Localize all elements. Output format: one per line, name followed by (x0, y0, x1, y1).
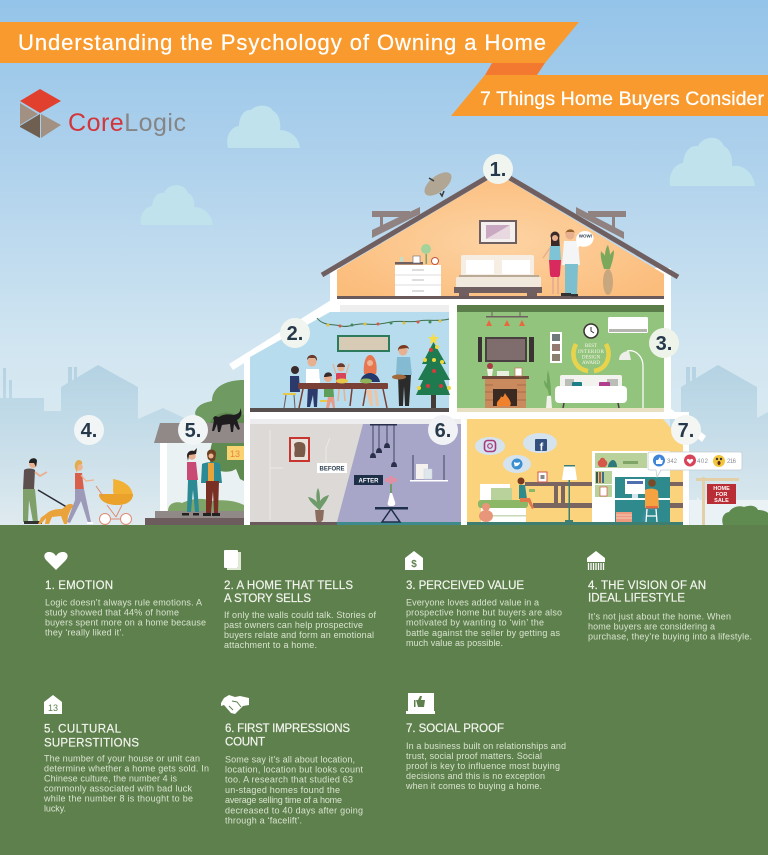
interior design award: BEST (585, 344, 597, 349)
social reactions bubble (648, 452, 742, 477)
text: emotion (45, 598, 206, 638)
icon: house number 13: 13 (48, 703, 58, 713)
home for sale sign (696, 477, 739, 525)
badge 6: 6. (435, 420, 451, 442)
instagram cloud (475, 437, 505, 455)
text: superstitions: commonly associated with bad luck (44, 783, 192, 793)
text: story (224, 610, 376, 650)
dresser (395, 244, 441, 296)
fireplace (482, 363, 529, 408)
panel: attic bedroom (322, 171, 678, 299)
bed with teddy (478, 484, 528, 522)
house number 13 sign: 13 (230, 449, 240, 459)
christmas tree (416, 333, 451, 408)
brown shelves (525, 482, 683, 508)
house walls (229, 268, 706, 525)
heading: superstitions: 5. CULTURAL (44, 723, 122, 735)
text: perceived value (406, 598, 562, 648)
text: story: If only the walls could talk. Stories of (224, 610, 376, 620)
background skyline (0, 365, 768, 525)
badge 4 (74, 415, 104, 445)
house number 13 sign (227, 446, 244, 460)
text: superstitions (43, 753, 209, 813)
text: first impressions (225, 755, 363, 825)
badge 3: 3. (656, 333, 672, 355)
heading: social proof: 7. SOCIAL PROOF (406, 723, 504, 735)
section: superstitions (43, 695, 209, 813)
text: first impressions: Some say it’s all about location, (225, 755, 355, 765)
table lamp (562, 465, 577, 522)
ribbon fold (485, 63, 545, 75)
ground panel (0, 525, 768, 855)
television and speakers (478, 337, 534, 362)
baby stroller (96, 479, 133, 524)
heading: perceived value: 3. PERCEIVED VALUE (406, 580, 524, 592)
heading: story: A STORY SELLS (224, 593, 311, 605)
couple viewing room (543, 229, 594, 296)
heading: lifestyle (588, 580, 706, 605)
home for sale sign: FOR (716, 492, 727, 498)
text: lifestyle: purchase, they’re buying into a lifestyle. (588, 631, 752, 641)
black cat (212, 408, 241, 432)
text: lifestyle: It’s not just about the home. When (588, 611, 731, 621)
text: emotion: study showed that 44% of home (45, 608, 179, 618)
heading: story (224, 580, 353, 605)
badge 3 (649, 328, 679, 358)
text: first impressions: through a ‘facelift’. (225, 815, 302, 825)
text: first impressions: un-staged homes found the (225, 785, 340, 795)
text: perceived value: Everyone loves added value in a (406, 598, 539, 608)
text: first impressions: average selling time of a home (225, 795, 342, 805)
icon: laptop with thumbs up (406, 693, 435, 714)
walking couple with dog and stroller (23, 458, 133, 524)
wall picture (479, 220, 517, 244)
text: superstitions: The number of your house or unit can (44, 753, 200, 763)
section: emotion (44, 552, 206, 638)
couple on porch (182, 448, 222, 516)
table with flowers (375, 476, 408, 522)
social reactions bubble: 402 (697, 459, 709, 465)
text: lifestyle (588, 611, 752, 641)
small wall frame (538, 472, 547, 482)
text: first impressions: decreased to 40 days after going (225, 805, 363, 815)
dining table (298, 378, 388, 408)
badge 1: 1. (490, 159, 506, 181)
girl with book (518, 478, 535, 509)
roof (322, 171, 678, 277)
interior design award: INTERIOR (578, 350, 605, 355)
text: perceived value: much value as possible. (406, 638, 503, 648)
text: first impressions: too. A research that studied 63 (225, 775, 353, 785)
heading: first impressions: COUNT (225, 736, 265, 748)
window blind (337, 335, 390, 352)
floor plant (544, 370, 552, 408)
heading: superstitions (44, 723, 139, 749)
badge 4: 4. (81, 420, 97, 442)
home for sale sign: SALE (714, 498, 729, 504)
text: social proof: trust, social proof matters. Social (406, 751, 542, 761)
badge 1 (483, 154, 513, 184)
sofa (555, 375, 627, 408)
dog (38, 504, 74, 524)
icon: house with fence (587, 551, 605, 570)
icon: book (224, 550, 241, 570)
section: lifestyle (587, 551, 752, 641)
icon: house number 13 (44, 695, 62, 714)
subtitle banner: 7 Things Home Buyers Consider (480, 88, 764, 110)
social reactions bubble: 216 (727, 459, 737, 465)
social reactions bubble: 342 (667, 459, 678, 465)
man at computer (641, 479, 659, 522)
CoreLogic logo: CoreLogic (68, 109, 186, 137)
facebook cloud (523, 433, 557, 454)
text: perceived value: prospective home but buyers are also (406, 608, 562, 618)
wow speech bubble: WOW! (579, 234, 593, 238)
badge 7 (671, 415, 701, 445)
text: first impressions: location, location but looks count (225, 765, 363, 775)
text: superstitions: Chinese culture, the number 4 is (44, 773, 178, 783)
section: perceived value (405, 551, 562, 648)
subtitle banner (451, 75, 768, 116)
track light (486, 312, 528, 326)
text: perceived value: motivated by wanting to ‘win’ the (406, 618, 544, 628)
text: emotion: buyers spent more on a home because (45, 618, 206, 628)
icon: handshake (221, 695, 249, 714)
floor lamp (619, 351, 643, 408)
text: perceived value: battle against the seller by getting as (406, 628, 560, 638)
heading: lifestyle: IDEAL LIFESTYLE (588, 593, 685, 605)
dining family (283, 345, 412, 408)
clouds (141, 106, 755, 225)
text: superstitions: lucky. (44, 803, 66, 813)
text: story: buyers relate and form an emotional (224, 630, 374, 640)
interior design award: AWARD (582, 361, 600, 366)
facebook cloud: f (540, 442, 544, 454)
heading: lifestyle: 4. THE VISION OF AN (588, 580, 706, 592)
badge 5: 5. (185, 420, 201, 442)
heading: emotion: 1. EMOTION (45, 580, 113, 592)
heading: superstitions: SUPERSTITIONS (44, 737, 139, 749)
icon: house with dollar (405, 551, 423, 570)
text: story: attachment to a home. (224, 640, 317, 650)
section: story (224, 550, 376, 650)
text: social proof (405, 741, 566, 791)
sky background (0, 0, 768, 526)
section: first impressions (221, 695, 363, 825)
badge 6 (428, 415, 458, 445)
white bookcase and desk (592, 451, 670, 522)
CoreLogic logo (20, 89, 186, 138)
potted plant (601, 245, 614, 295)
solar panels (372, 207, 626, 239)
heading: story: 2. A HOME THAT TELLS (224, 580, 353, 592)
text: emotion: Logic doesn’t always rule emotions. A (45, 598, 202, 608)
old picture (289, 437, 310, 462)
twitter cloud (503, 455, 531, 473)
white fence (689, 497, 768, 525)
icon: house with dollar: $ (411, 559, 417, 570)
panel: dining room (250, 305, 451, 412)
text: superstitions: determine whether a home gets sold. In (44, 763, 209, 773)
heading: first impressions: 6. FIRST IMPRESSIONS (225, 723, 350, 735)
wall clock (584, 324, 598, 338)
text: social proof: proof is key to influence most buying (406, 761, 560, 771)
badge 2: 2. (287, 323, 303, 345)
before label (317, 463, 347, 473)
panel: before and after room (250, 419, 461, 525)
after label: AFTER (358, 478, 379, 484)
air conditioner (608, 317, 648, 333)
home for sale sign: HOME (713, 486, 730, 492)
interior design award (573, 344, 609, 371)
text: social proof: decisions and this is no exception (406, 771, 545, 781)
after label (354, 475, 383, 485)
badge 7: 7. (678, 420, 694, 442)
bush (722, 506, 768, 525)
bed (454, 255, 542, 296)
wall photo frames (550, 332, 562, 363)
heading: first impressions (225, 723, 350, 748)
porch and tree (145, 380, 244, 525)
text: superstitions: while the number 8 is thought to be (43, 793, 193, 803)
interior design award: DESIGN (582, 356, 601, 360)
text: lifestyle: home buyers are considering a (588, 621, 715, 631)
string lights (317, 318, 449, 328)
satellite dish (420, 168, 456, 200)
panel: home office and bedroom (467, 419, 683, 525)
before label: BEFORE (320, 466, 344, 472)
badge 2 (280, 318, 310, 348)
title banner (0, 22, 579, 63)
badge 5 (178, 415, 208, 445)
pendant lamps (370, 424, 397, 467)
title banner: Understanding the Psychology of Owning a Home (18, 30, 546, 55)
icon: heart (44, 552, 68, 570)
text: social proof: when it comes to buying a home. (405, 781, 542, 791)
section: social proof (405, 693, 566, 791)
text: social proof: In a business built on relationships and (406, 741, 566, 751)
wall shelf (410, 455, 448, 482)
text: story: past owners can help prospective (224, 620, 363, 630)
number badges (74, 154, 701, 445)
panel: living room (457, 305, 664, 412)
fern plant (308, 488, 329, 522)
text: emotion: they ‘really liked it’. (45, 628, 124, 638)
